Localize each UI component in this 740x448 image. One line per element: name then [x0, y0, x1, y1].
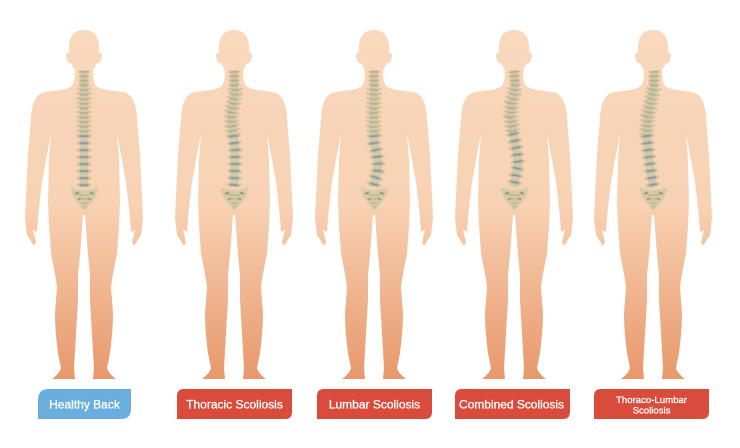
panel: combined scoliosis figure — [455, 30, 573, 419]
body silhouette — [315, 30, 433, 379]
label: Thoraco-Lumbar Scoliosis: Thoraco-Lumbar — [616, 395, 688, 406]
label: Lumbar Scoliosis — [317, 389, 432, 419]
label: Healthy Back: Healthy Back — [49, 398, 121, 412]
spine: lumbar curve — [361, 71, 388, 211]
label: Thoracic Scoliosis: Thoracic Scoliosis — [186, 398, 283, 412]
panel: thoraco-lumbar scoliosis figure — [594, 30, 712, 419]
label: Lumbar Scoliosis: Lumbar Scoliosis — [329, 398, 420, 412]
label: Combined Scoliosis: Combined Scoliosis — [459, 398, 564, 412]
body silhouette — [175, 30, 293, 379]
spine: combined curve — [501, 71, 528, 211]
label: Healthy Back — [38, 389, 131, 419]
panel: healthy back figure — [25, 30, 143, 419]
panel: thoracic scoliosis figure — [175, 30, 293, 419]
body silhouette — [455, 30, 573, 379]
spine: thoracic curve — [221, 71, 248, 211]
spine: thoraco-lumbar curve — [640, 71, 667, 211]
label: Thoracic Scoliosis — [177, 389, 292, 419]
label: Combined Scoliosis — [455, 389, 570, 419]
spine: straight — [71, 71, 98, 211]
body silhouette — [594, 30, 712, 379]
label: Thoraco-Lumbar Scoliosis: Scoliosis — [633, 406, 671, 416]
body silhouette — [25, 30, 143, 379]
panel: lumbar scoliosis figure — [315, 30, 433, 419]
label: Thoraco-Lumbar Scoliosis — [594, 389, 709, 419]
